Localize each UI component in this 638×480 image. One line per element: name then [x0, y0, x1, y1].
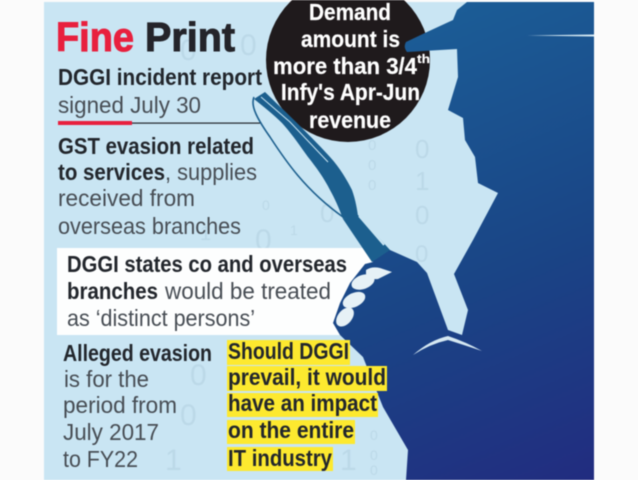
- hat highlight line: [527, 34, 594, 36]
- binary digit pattern: 0: [320, 198, 334, 228]
- title: Fine Print: Fine: [56, 14, 134, 60]
- binary digit pattern: 1: [340, 444, 357, 477]
- text block: GST evasion: [58, 133, 257, 239]
- binary digit pattern: 0: [370, 447, 378, 463]
- text block: alleged evasion: to FY22: [63, 446, 138, 472]
- text block: distinct persons: DGGI states co and overseas: [67, 251, 347, 277]
- circle text: more than 3/4: [273, 53, 417, 79]
- highlighted callout: industry impact: have an impact: [228, 390, 377, 416]
- collar highlight: [413, 336, 482, 355]
- text block: GST evasion: received from: [58, 185, 195, 211]
- text block: distinct persons: branches: [67, 278, 158, 304]
- binary digit pattern: [165, 29, 429, 478]
- binary digit pattern: 0: [262, 197, 270, 213]
- highlighted callout: industry impact: Should DGGI: [228, 338, 349, 364]
- highlighted callout: industry impact: on the entire: [228, 417, 354, 443]
- text block: GST evasion: , supplies: [165, 159, 257, 185]
- circle text: th: [417, 52, 430, 66]
- text block: alleged evasion: is for the: [64, 366, 149, 392]
- binary digit pattern: 0: [180, 34, 197, 67]
- text block: incident report: DGGI incident report: [58, 64, 262, 90]
- text block: alleged evasion: [63, 340, 212, 472]
- text block: incident report: signed July 30: [58, 92, 201, 118]
- binary digit pattern: 0: [415, 134, 429, 164]
- binary digit pattern: 0: [370, 462, 378, 478]
- circle text: [273, 0, 430, 133]
- binary digit pattern: 1: [415, 166, 429, 196]
- text block: GST evasion: GST evasion related: [58, 133, 254, 159]
- title: Fine Print: [56, 14, 235, 60]
- binary digit pattern: 0: [415, 200, 429, 230]
- circle text: revenue: [309, 107, 391, 133]
- binary digit pattern: 0: [190, 359, 207, 392]
- title: Fine Print: Print: [145, 14, 235, 60]
- circle text: Infy's Apr-Jun: [281, 79, 420, 105]
- speech circle: [266, 0, 430, 142]
- binary digit pattern: 0: [240, 29, 257, 62]
- binary digit pattern: 1: [200, 223, 211, 245]
- binary digit pattern: 1: [290, 222, 298, 238]
- binary digit pattern: 0: [368, 177, 376, 194]
- hand fingers: [333, 267, 392, 330]
- text block: distinct persons: [67, 251, 347, 331]
- text block: alleged evasion: period from: [63, 392, 177, 418]
- text block: GST evasion: overseas branches: [58, 213, 241, 239]
- text block: distinct persons: as ‘distinct persons’: [67, 305, 255, 331]
- binary digit pattern: 0: [368, 137, 376, 154]
- binary digit pattern: 0: [255, 224, 272, 257]
- highlighted callout: industry impact: [227, 338, 387, 471]
- binary digit pattern: 0: [370, 427, 378, 443]
- binary digit pattern: 1: [165, 444, 182, 477]
- binary digit pattern: 0: [368, 157, 376, 174]
- text block: alleged evasion: July 2017: [63, 419, 159, 445]
- text block: incident report: [58, 64, 262, 118]
- binary digit pattern: 0: [415, 241, 428, 268]
- highlighted callout: industry impact: prevail, it would: [228, 364, 386, 390]
- highlighted callout: industry impact: IT industry: [228, 445, 332, 471]
- text block: alleged evasion: Alleged evasion: [63, 340, 212, 366]
- circle text: amount is: [301, 26, 400, 52]
- text block: GST evasion: to services: [58, 159, 165, 185]
- divider rule: [58, 121, 260, 125]
- binary digit pattern: 0: [180, 399, 197, 432]
- text block: distinct persons: would be treated: [164, 278, 331, 304]
- magnifying glass: [253, 92, 390, 262]
- white callout box: [57, 248, 377, 335]
- silhouette: detective: [333, 2, 594, 480]
